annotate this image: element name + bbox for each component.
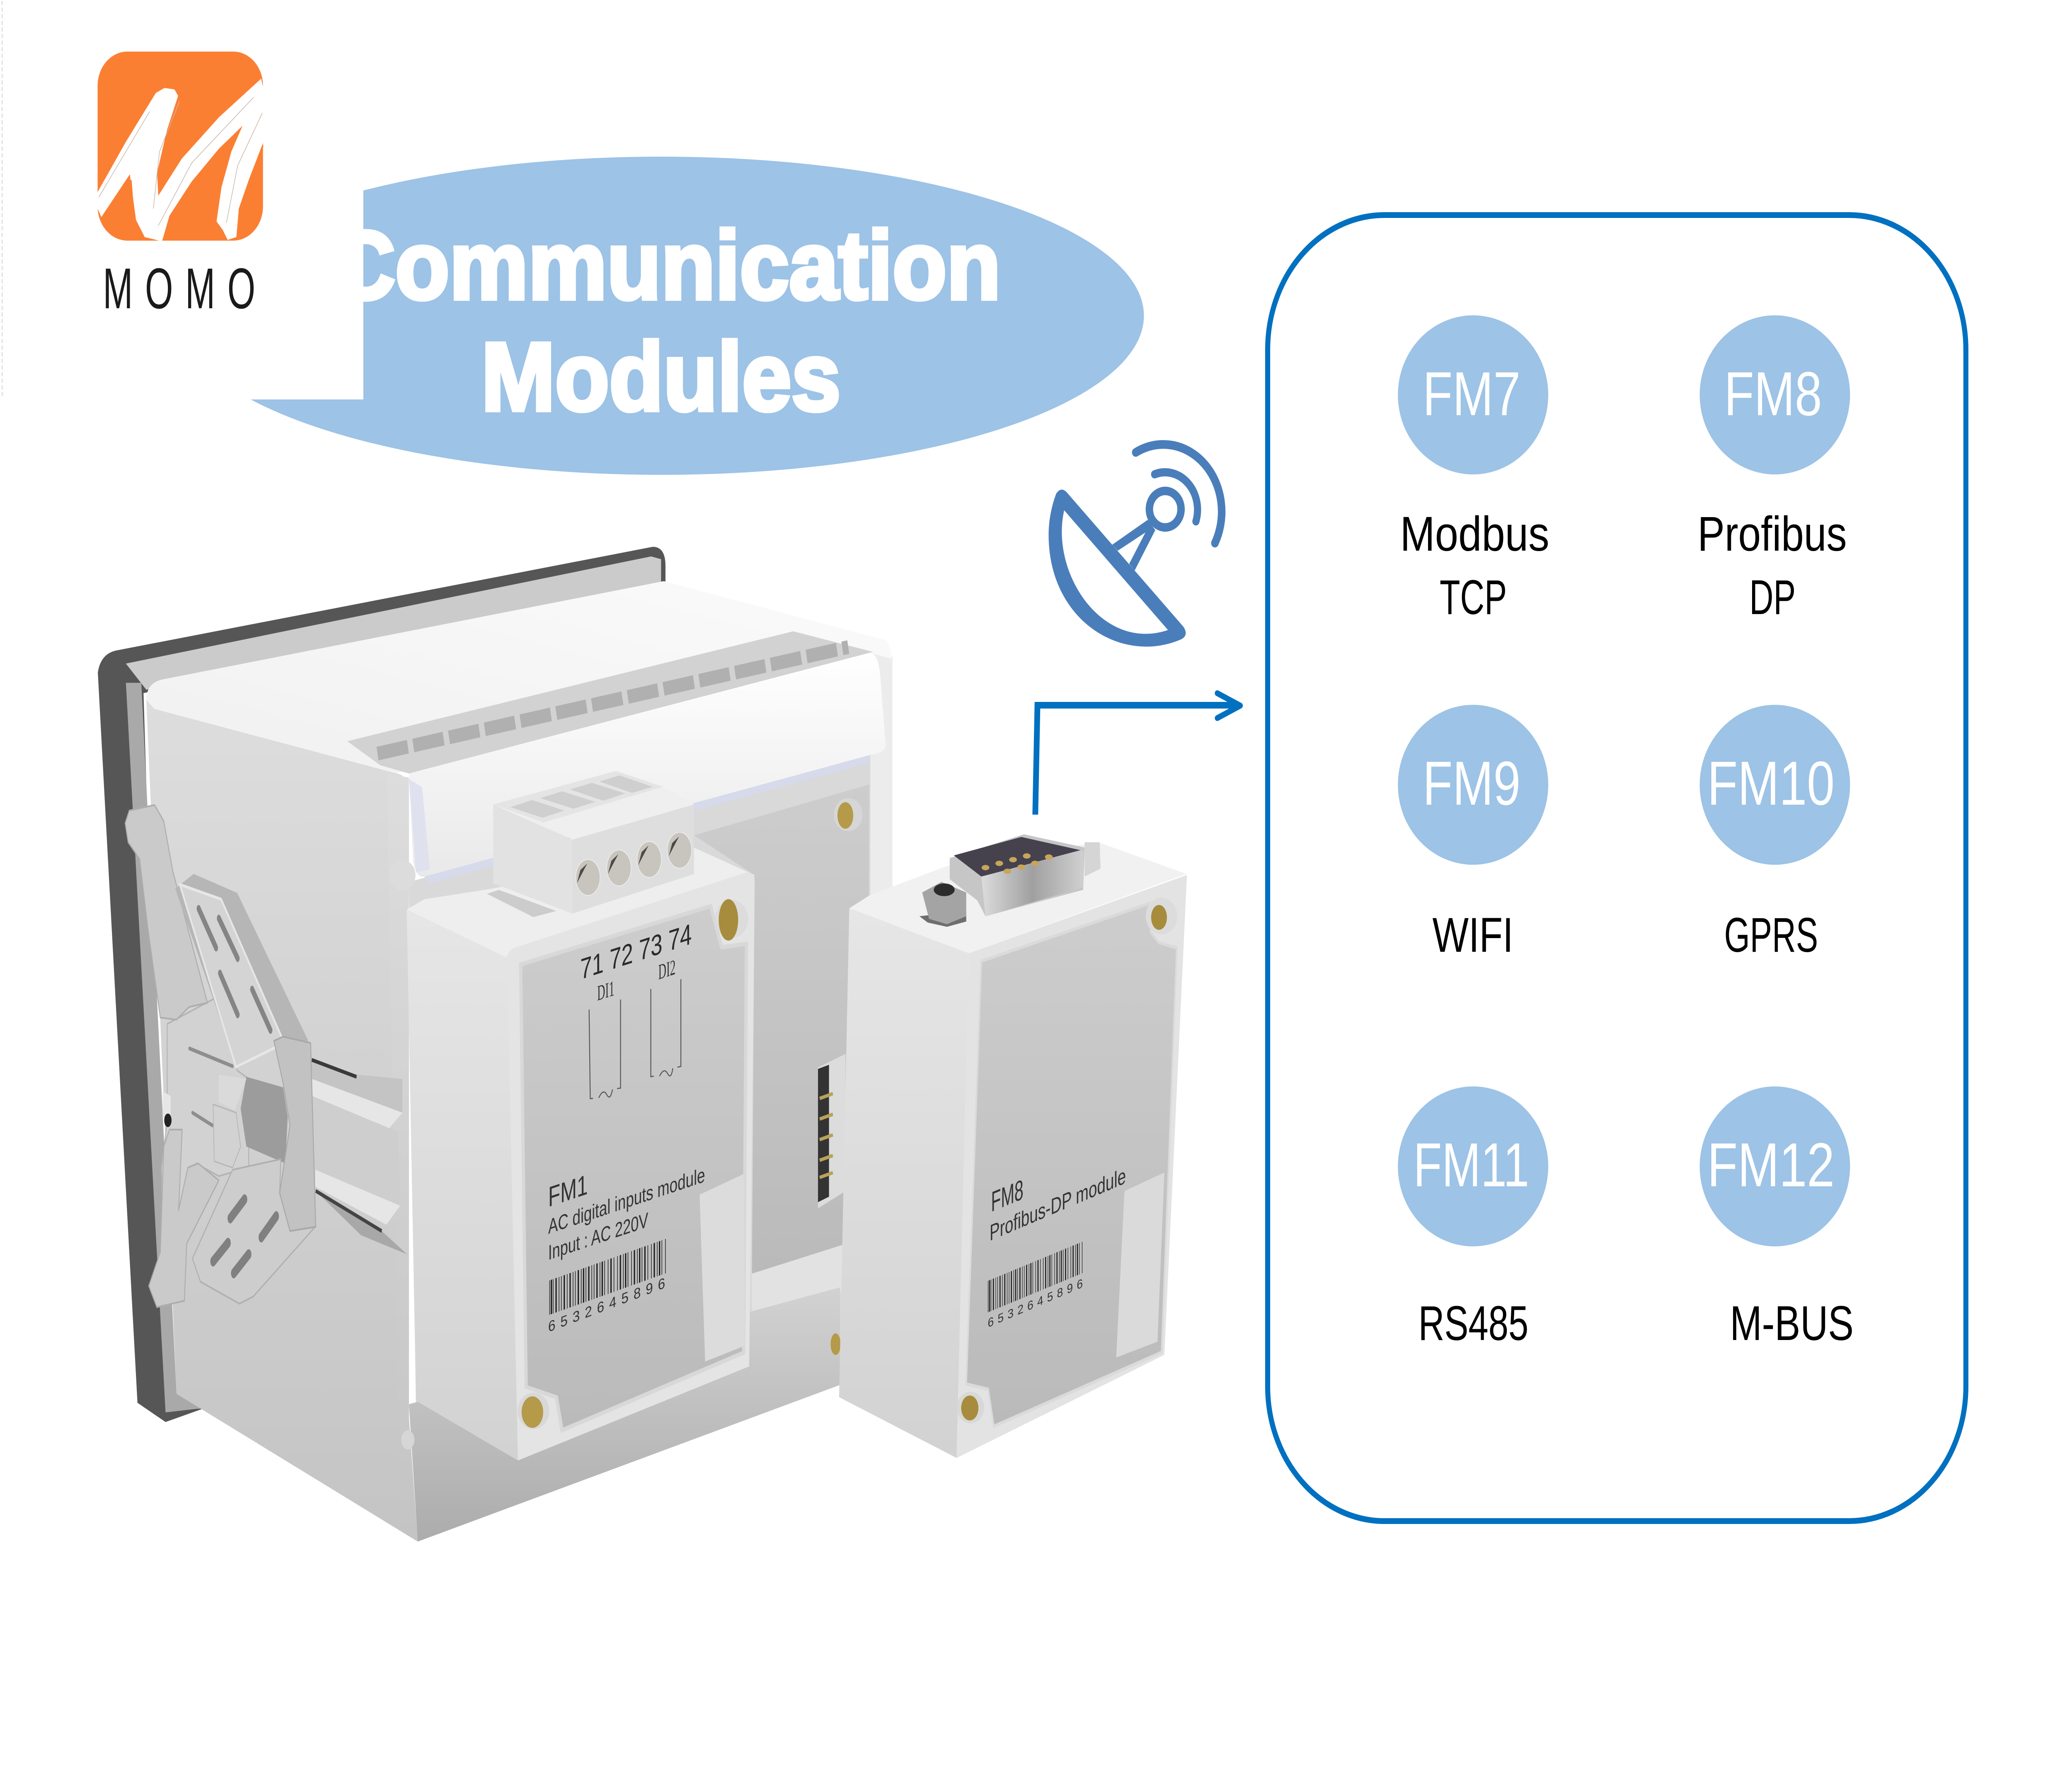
rear clip plate	[162, 999, 249, 1299]
terminal holes	[576, 832, 692, 895]
expansion connector slot	[818, 1054, 845, 1208]
FM8 label text: Profibus-DP module	[990, 1163, 1126, 1246]
terminal numbers: 71 72 73 74	[580, 918, 692, 986]
terminal slots	[511, 775, 653, 818]
FM8 label text	[990, 1163, 1126, 1246]
item: FM9: WIFI	[1433, 908, 1513, 963]
FM1 label text	[548, 1164, 705, 1265]
title: Communication Modules	[331, 212, 1001, 431]
gold pin	[830, 1333, 841, 1355]
item: FM11: FM11	[1414, 1130, 1529, 1200]
FM1 barcode digits: 6532645896	[548, 1275, 665, 1335]
module FM1	[407, 848, 755, 1461]
item: FM7: Modbus	[1400, 507, 1549, 561]
din-rail clip and rails	[125, 805, 407, 1307]
upper lever	[125, 805, 207, 1020]
item: FM11: RS485	[1418, 1296, 1528, 1351]
logo mark	[98, 51, 265, 241]
lower lever	[149, 1130, 219, 1307]
meter housing	[98, 547, 892, 1541]
icon: satellite dish	[1048, 445, 1222, 647]
FM1 label text: Input : AC 220V	[548, 1209, 648, 1265]
item: FM8	[1697, 315, 1850, 625]
DI labels: DI1	[597, 976, 615, 1005]
FM8 housing	[839, 835, 1187, 1458]
FM1 label text: AC digital inputs module	[548, 1164, 705, 1238]
terminal block	[487, 771, 694, 917]
DI labels	[597, 955, 675, 1005]
FM8 top screw	[1146, 898, 1177, 934]
FM8 barcode digits: 6532645896	[988, 1277, 1083, 1330]
title: Communication Modules: Communication	[331, 212, 1001, 319]
item: FM8: Profibus	[1697, 507, 1847, 561]
item: FM10	[1700, 705, 1850, 963]
logo wordmark: MOMO	[103, 256, 268, 321]
product: main meter body	[98, 547, 892, 1541]
lower plate	[192, 1159, 315, 1304]
item: FM11	[1398, 1086, 1548, 1351]
hex standoff	[920, 882, 966, 927]
latch	[213, 1075, 247, 1168]
module FM8	[839, 835, 1187, 1458]
item: FM9	[1398, 705, 1548, 963]
rear recess panel	[694, 784, 869, 1274]
wiring schematic	[589, 979, 681, 1098]
item: FM7	[1398, 315, 1549, 625]
item: FM8: DP	[1749, 570, 1796, 625]
DB9 connector	[950, 835, 1101, 916]
item: FM9: FM9	[1423, 748, 1520, 818]
item: FM10: FM10	[1707, 748, 1835, 818]
FM1 bottom screw	[518, 1393, 549, 1429]
logo block	[0, 0, 363, 399]
clip grip	[274, 1037, 316, 1231]
item: FM8: FM8	[1724, 359, 1822, 428]
panel border	[1268, 215, 1966, 1521]
FM8 bottom screw	[957, 1392, 984, 1423]
FM1 top screw	[715, 899, 748, 941]
FM1 housing	[407, 848, 755, 1461]
item: FM12: M-BUS	[1730, 1296, 1854, 1351]
item: FM12	[1700, 1086, 1854, 1351]
FM1 barcode	[549, 1239, 666, 1315]
DI labels: DI2	[658, 955, 675, 984]
item: FM7: FM7	[1423, 359, 1520, 428]
recess screw	[834, 798, 863, 831]
title: Communication Modules: Modules	[481, 323, 841, 431]
panel: module list	[1268, 215, 1966, 1521]
item: FM7: TCP	[1440, 570, 1507, 625]
rails	[312, 1060, 407, 1254]
arrow to module list	[1035, 693, 1240, 815]
upper plate	[175, 874, 308, 1068]
FM1 label text: FM1	[548, 1168, 588, 1213]
title ellipse	[179, 157, 1144, 475]
item: FM12: FM12	[1707, 1130, 1835, 1200]
rail opening	[241, 1077, 288, 1164]
FM8 barcode	[988, 1242, 1082, 1312]
FM8 label text: FM8	[991, 1173, 1024, 1218]
item: FM10: GPRS	[1724, 908, 1818, 963]
